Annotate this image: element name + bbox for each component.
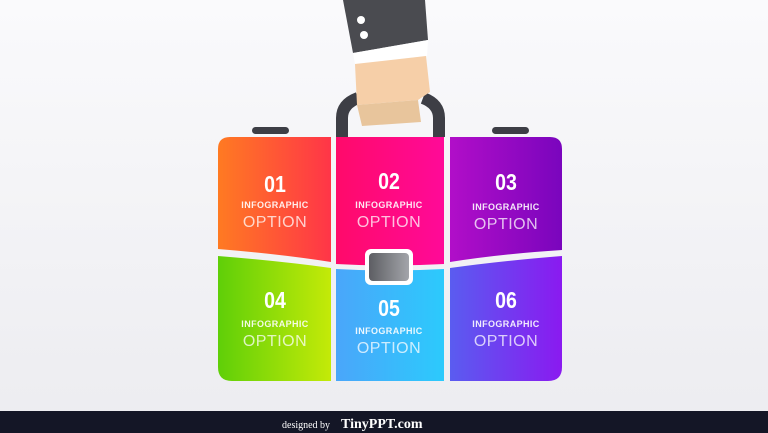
clasp xyxy=(365,249,413,285)
panel 03: OPTION xyxy=(474,216,538,233)
footer bar xyxy=(0,411,768,433)
panel 04: OPTION xyxy=(243,333,307,350)
panel 06: INFOGRAPHIC xyxy=(472,319,540,329)
panel 04: 04 xyxy=(264,288,286,313)
panel 01: OPTION xyxy=(243,214,307,231)
panel 06: 06 xyxy=(495,288,517,313)
panel 04 xyxy=(218,256,331,381)
panel 01: INFOGRAPHIC xyxy=(241,200,309,210)
panel 04: INFOGRAPHIC xyxy=(241,319,309,329)
panel 05: OPTION xyxy=(357,340,421,357)
panel 05: 05 xyxy=(378,296,400,321)
briefcase top handles xyxy=(252,127,529,134)
panel 01: 01 xyxy=(264,172,286,197)
panel 02 xyxy=(336,137,444,266)
footer bar: TinyPPT.com xyxy=(341,417,423,432)
panel 02: OPTION xyxy=(357,214,421,231)
panel 03: 03 xyxy=(495,170,517,195)
panel 05 xyxy=(336,269,444,381)
panel 05: INFOGRAPHIC xyxy=(355,326,423,336)
panel 02: INFOGRAPHIC xyxy=(355,200,423,210)
panel 06: OPTION xyxy=(474,333,538,350)
panel 03 xyxy=(450,137,562,262)
carry handle xyxy=(342,98,439,137)
hand holding case xyxy=(343,0,430,126)
panel 01 xyxy=(218,137,331,262)
panel 02: 02 xyxy=(378,169,400,194)
panel 03: INFOGRAPHIC xyxy=(472,202,540,212)
footer bar: designed by xyxy=(282,420,330,431)
panel 06 xyxy=(450,256,562,381)
